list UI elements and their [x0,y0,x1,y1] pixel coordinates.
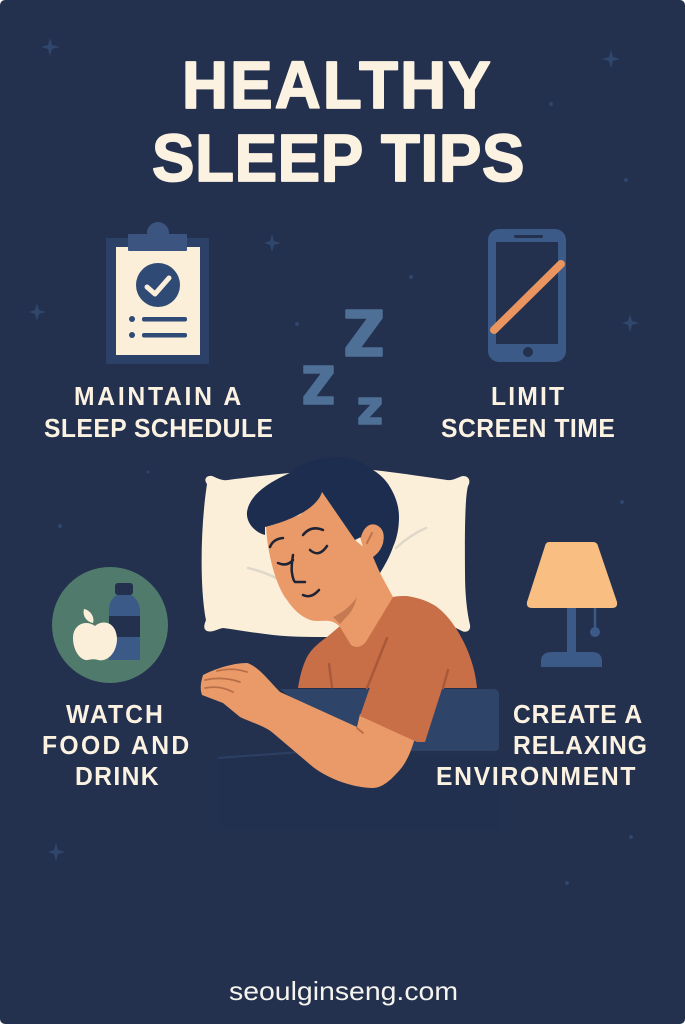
label: create a relaxing environment: RELAXING [513,731,647,760]
label: maintain a sleep schedule: MAINTAIN A [74,382,241,411]
hair [247,457,399,573]
blanket edge [218,752,300,758]
pillow [202,470,470,637]
footer website: seoulginseng.com [229,976,458,1006]
title: HEALTHY [182,48,491,122]
forearm and hand [201,663,415,788]
label: watch food and drink [42,700,189,791]
icon: clipboard with checkmark [106,222,209,364]
label: create a relaxing environment: CREATE A [513,700,642,729]
neck shadow [333,597,357,624]
title [152,48,524,195]
finger lines [205,669,363,733]
icon: crossed-out smartphone [488,229,566,362]
label: create a relaxing environment [436,700,647,791]
label: maintain a sleep schedule: SLEEP SCHEDULE [44,414,273,443]
icon: apple and water bottle [52,567,168,683]
shirt fold [329,664,332,687]
label: limit screen time: SCREEN TIME [441,414,615,443]
icon: sleeping Z letters [304,310,382,424]
sleeve [360,638,448,742]
pillow creases [248,528,426,579]
label: limit screen time: LIMIT [491,382,565,411]
ear [360,523,384,557]
label: watch food and drink: WATCH [66,700,163,729]
shirt body [298,596,477,688]
illustration: sleeping person in bed [201,457,500,830]
bed base [218,757,500,830]
label: create a relaxing environment: ENVIRONMENT [436,762,636,791]
label: watch food and drink: FOOD AND [42,731,189,760]
icon: bedside lamp [527,542,617,667]
label: watch food and drink: DRINK [75,762,159,791]
title: SLEEP TIPS [152,121,524,195]
label: limit screen time [441,382,615,443]
face details [270,528,327,596]
sleeve folds [367,638,448,688]
background stars [29,38,639,885]
head and neck [266,492,393,647]
blanket [280,689,499,751]
label: maintain a sleep schedule [44,382,273,443]
